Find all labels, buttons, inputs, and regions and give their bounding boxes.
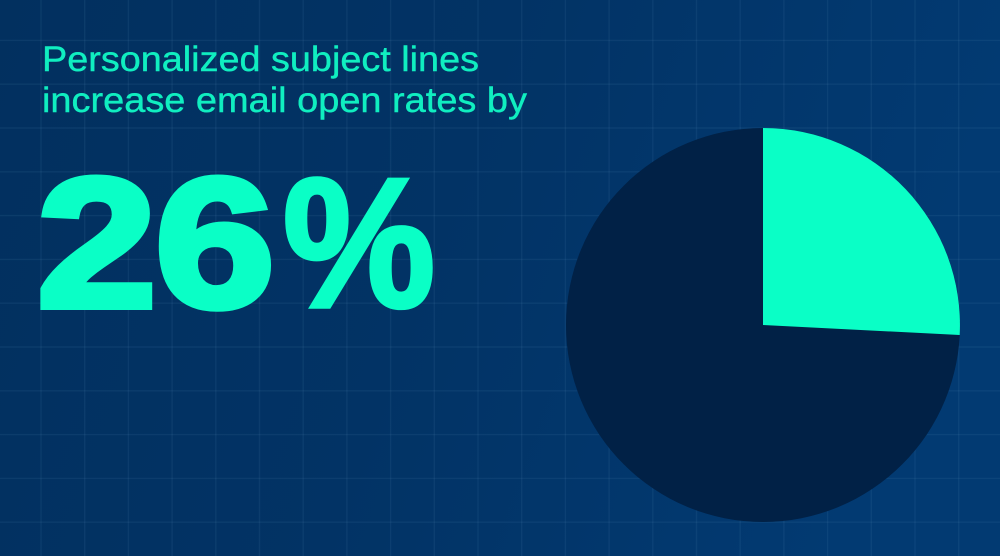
big statistic: 26%: 6	[155, 141, 275, 346]
big statistic: 26%	[37, 140, 435, 346]
big statistic: 26%: 2	[37, 141, 157, 346]
pie slice: remainder 74%	[566, 128, 960, 522]
heading	[42, 40, 528, 120]
pie chart	[566, 128, 960, 522]
big statistic: 26%: %	[283, 140, 435, 346]
heading: increase email open rates by	[42, 81, 528, 120]
pie slice: 26%	[763, 128, 960, 335]
heading: Personalized subject lines	[42, 40, 479, 79]
